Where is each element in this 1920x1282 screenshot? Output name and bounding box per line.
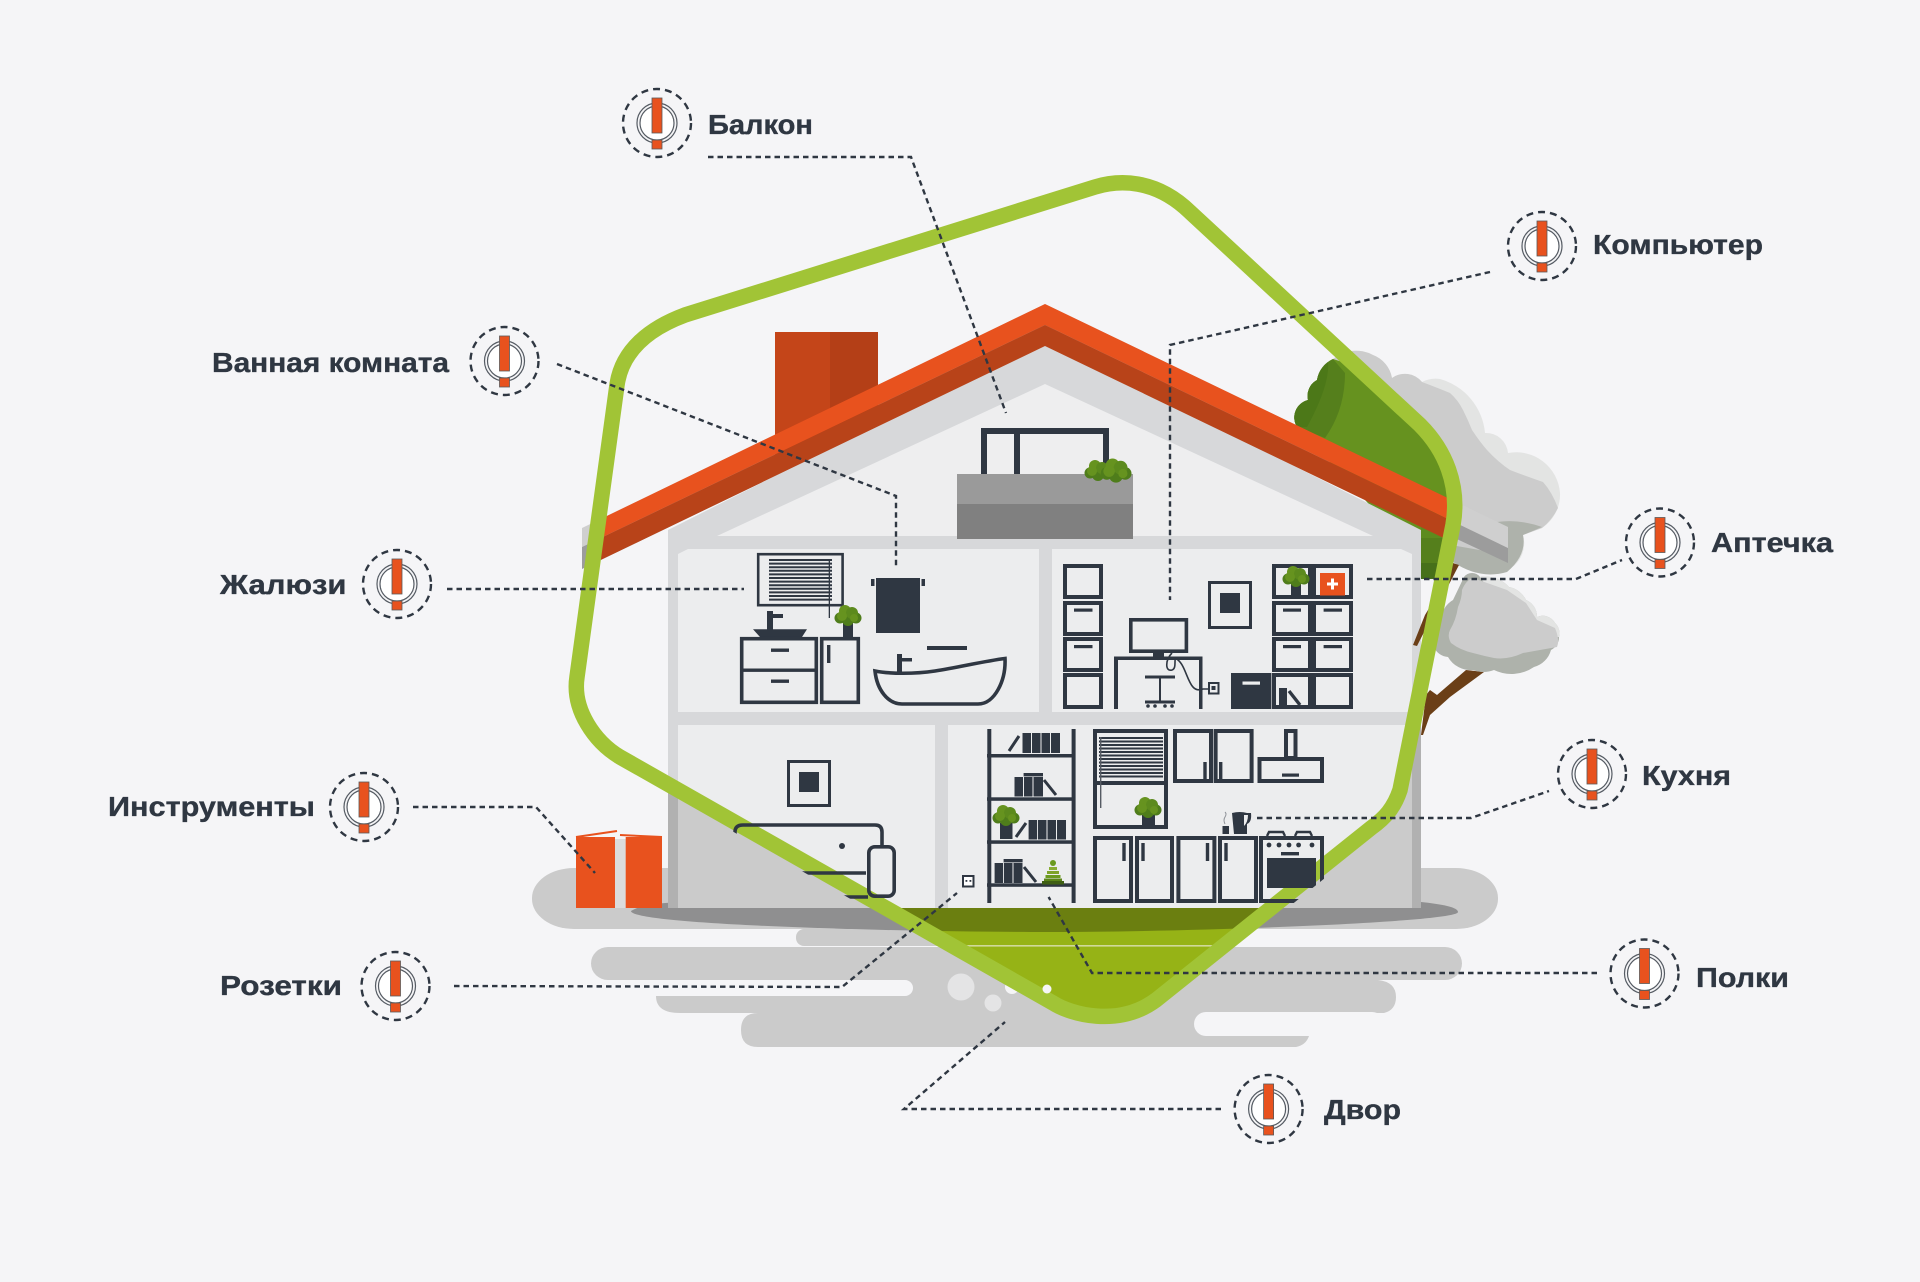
- sink and cabinets: [740, 605, 862, 702]
- callout: computer: [1508, 212, 1763, 280]
- towel: [871, 578, 925, 633]
- icon: warning: [1610, 940, 1678, 1008]
- label: Ванная комната: [212, 347, 449, 378]
- grey roof eaves: [582, 304, 1508, 569]
- label: Жалюзи: [219, 569, 346, 600]
- green tree crown: [1294, 359, 1447, 579]
- stove: [1261, 832, 1322, 901]
- leader line: computer: [1170, 272, 1490, 600]
- grey tree crown: [1294, 351, 1560, 574]
- label: Полки: [1696, 962, 1789, 993]
- kettle and cup: [1222, 812, 1251, 834]
- icon: warning: [623, 89, 691, 157]
- callout: kitchen: [1558, 740, 1731, 808]
- green hexagon frame: [576, 183, 1455, 1016]
- picture: [788, 762, 830, 806]
- attic: [717, 384, 1373, 536]
- leader line: first-aid kit: [1367, 560, 1622, 579]
- label: Кухня: [1642, 760, 1731, 791]
- leader line: sockets: [454, 893, 957, 987]
- wall picture: [1210, 582, 1250, 628]
- label: Аптечка: [1711, 527, 1833, 558]
- coloured cut-away inside frame: [600, 304, 1447, 1009]
- icon: warning: [1558, 740, 1626, 808]
- icon: warning: [1235, 1075, 1303, 1143]
- callout: balcony: [623, 89, 813, 157]
- label: Балкон: [708, 109, 813, 140]
- house walls: [668, 340, 1421, 908]
- right cabinet with first-aid kit: [1274, 566, 1351, 707]
- tree trunk: [1413, 563, 1484, 735]
- books row 4: [995, 859, 1036, 883]
- plant and books row 3: [992, 805, 1066, 840]
- leader line: kitchen: [1257, 791, 1549, 818]
- toy pyramid: [1042, 860, 1064, 884]
- icon: warning: [330, 773, 398, 841]
- balcony: [957, 428, 1133, 539]
- lower tree crown: [1433, 573, 1560, 674]
- callout: bathroom: [212, 327, 538, 395]
- tools crates: [576, 831, 662, 908]
- leader line: balcony: [708, 157, 1006, 413]
- books row 1: [1009, 733, 1060, 753]
- first-aid kit: [1320, 573, 1345, 596]
- leader line: bathroom: [557, 364, 896, 567]
- books row 2: [1014, 773, 1056, 796]
- bathtub: [875, 646, 1005, 704]
- shelves: [987, 729, 1076, 903]
- kitchen: [1093, 731, 1322, 901]
- small white pebble on frame: [1042, 984, 1052, 994]
- callout: shelves: [1610, 940, 1789, 1008]
- label: Компьютер: [1593, 229, 1763, 260]
- cooker hood: [1260, 731, 1322, 781]
- chimney: [775, 332, 878, 462]
- leader line: yard: [904, 1022, 1221, 1109]
- kitchen window with blinds: [1093, 731, 1168, 827]
- storage box: [1231, 673, 1271, 709]
- leader line: tools: [413, 807, 595, 873]
- label: Розетки: [220, 970, 342, 1001]
- icon: warning: [1508, 212, 1576, 280]
- grey house body: [668, 530, 1421, 908]
- ground clouds: [532, 868, 1498, 1047]
- callout: blinds: [219, 550, 431, 618]
- roof: [600, 304, 1447, 560]
- label: Инструменты: [108, 791, 315, 822]
- living room: [788, 762, 974, 886]
- callout: sockets: [220, 952, 430, 1020]
- callout: yard: [1235, 1075, 1401, 1143]
- icon: warning: [362, 952, 430, 1020]
- callout: first-aid kit: [1626, 508, 1833, 576]
- icon: warning: [363, 550, 431, 618]
- office room: [1065, 566, 1351, 709]
- leader line: shelves: [1049, 897, 1597, 973]
- left cabinet: [1065, 566, 1101, 707]
- green ground: [902, 908, 1258, 1009]
- house shadow: [631, 902, 1458, 932]
- wall socket: [963, 876, 974, 886]
- label: Двор: [1324, 1094, 1401, 1125]
- bathroom: [740, 554, 1005, 704]
- sofa: [735, 825, 894, 897]
- wall cabinets: [1175, 731, 1252, 781]
- leader line: blinds: [447, 588, 744, 590]
- base cabinets: [1095, 838, 1256, 901]
- icon: warning: [1626, 508, 1694, 576]
- computer desk: [1114, 620, 1218, 709]
- bathroom window with blinds: [758, 554, 843, 618]
- icon: warning: [470, 327, 538, 395]
- callout: tools: [108, 773, 398, 841]
- rooms: [678, 549, 1412, 908]
